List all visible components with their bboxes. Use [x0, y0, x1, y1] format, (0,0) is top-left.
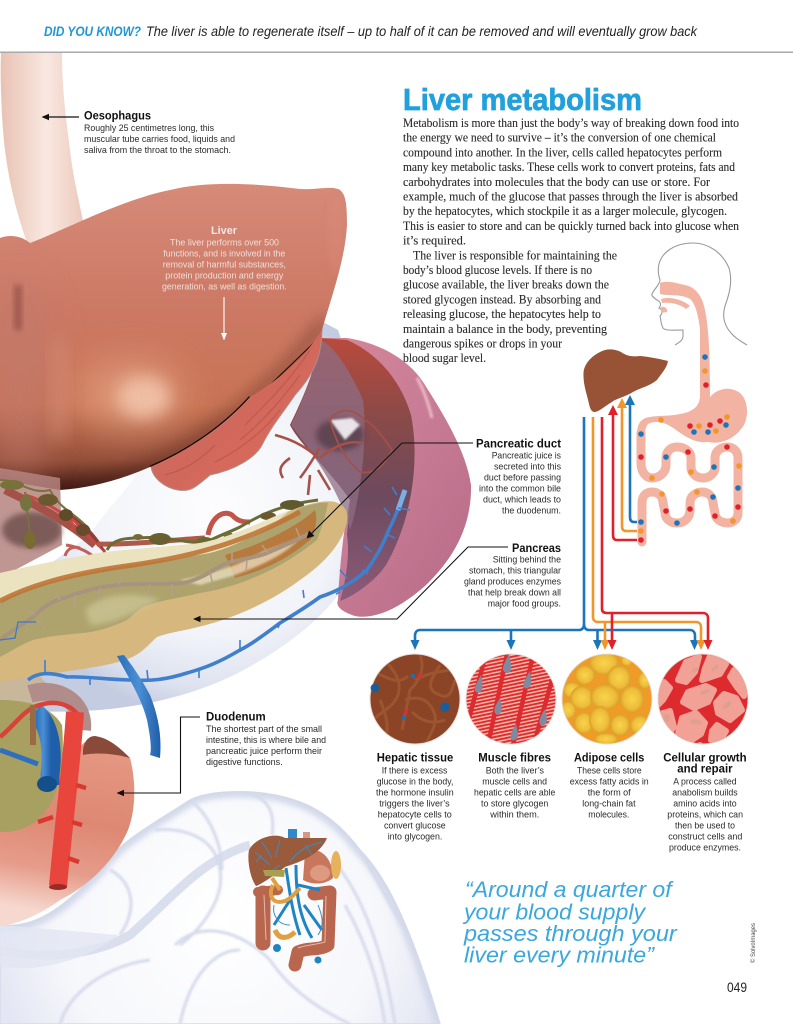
callout: duodenum: digestive functions.: [206, 756, 283, 767]
circle: muscle fibres: [466, 650, 556, 745]
digestive tract: [637, 282, 747, 542]
callout: liver: Liver: [211, 225, 238, 237]
body text: dangerous spikes or drops in your: [403, 336, 563, 350]
callout: pancreatic duct: duct before passing: [484, 472, 561, 482]
callout: pancreatic duct: into the common bile: [479, 482, 561, 494]
column: muscle fibres: hepatic cells are able: [474, 786, 555, 797]
column: cellular growth and repair: Cellular growth: [663, 751, 747, 765]
distribution arrows to cells: [410, 417, 712, 650]
callout: pancreatic duct: the duodenum.: [502, 504, 561, 516]
column: cellular growth and repair: produce enzymes.: [669, 841, 741, 852]
column: adipose cells: long-chain fat: [582, 797, 636, 808]
body text: glucose available, the liver breaks down the: [403, 278, 609, 292]
callout: liver: functions, and is involved in the: [163, 247, 285, 258]
column: cellular growth and repair: amino acids into: [673, 797, 737, 808]
column: adipose cells: excess fatty acids in: [570, 775, 649, 786]
column: hepatic tissue: glucose in the body,: [377, 775, 453, 786]
column: muscle fibres: within them.: [489, 808, 539, 819]
illustration: oesophagus: [1, 52, 84, 245]
callout: oesophagus: [42, 108, 235, 155]
pull quote: [462, 877, 678, 968]
illustration: miniature abdominal organs: [248, 829, 341, 965]
callout: duodenum: The shortest part of the small: [206, 723, 322, 734]
digestive system diagram: [583, 243, 747, 543]
callout: pancreatic duct: Pancreatic juice is: [492, 450, 561, 460]
callout: pancreas: Sitting behind the: [493, 554, 561, 565]
column: muscle fibres: Muscle fibres: [478, 751, 551, 765]
body text: [403, 116, 739, 365]
did you know label: DID YOU KNOW?: [44, 24, 141, 39]
callout: pancreas: Pancreas: [512, 541, 561, 555]
column: cellular growth and repair: A process called: [673, 775, 737, 786]
illustration: transparent large intestine: [0, 792, 440, 1024]
did you know fact: The liver is able to regenerate itself – up to half of it can be removed and will eventually grow back: [146, 23, 698, 39]
column: hepatic tissue: If there is excess: [382, 764, 448, 775]
illustration: feeding vessels above pancreas: [97, 500, 318, 550]
image credit: © SolvoImages: [749, 922, 757, 963]
column: muscle fibres: Both the liver’s: [486, 764, 544, 775]
column: adipose cells: These cells store: [577, 764, 642, 775]
header strip: [0, 23, 793, 53]
column: hepatic tissue: triggers the liver’s: [379, 797, 450, 808]
column: muscle fibres: [474, 751, 555, 819]
body text: carbohydrates into molecules that the body can use or store. For: [403, 175, 711, 189]
column: cellular growth and repair: anabolism builds: [672, 786, 738, 797]
illustration: translucent liver lobe with vessels: [0, 468, 105, 578]
column: hepatic tissue: [376, 751, 454, 841]
callout: pancreas: gland produces enzymes: [464, 576, 561, 587]
callout: liver: removal of harmful substances,: [163, 258, 286, 269]
body text: example, much of the glucose that passes through the liver is absorbed: [403, 190, 739, 204]
illustration: duodenum: [0, 692, 134, 926]
callout: pancreatic duct: Pancreatic duct: [476, 436, 561, 450]
head outline: [652, 243, 747, 345]
callout: liver: protein production and energy: [165, 269, 284, 280]
callout: duodenum: pancreatic juice perform their: [206, 745, 322, 756]
callout: pancreatic duct: secreted into this: [494, 460, 561, 472]
callout: oesophagus: Roughly 25 centimetres long, this: [84, 122, 214, 133]
body text: The liver is responsible for maintaining the: [413, 248, 617, 262]
column: hepatic tissue: Hepatic tissue: [377, 751, 454, 765]
column: adipose cells: molecules.: [588, 808, 629, 819]
body text: maintain a balance in the body, preventing: [403, 322, 607, 336]
body text: compound into another. In the liver, cells called hepatocytes perform: [403, 145, 722, 159]
column: muscle fibres: muscle cells and: [482, 775, 547, 786]
callout: pancreas: stomach, this triangular: [469, 565, 561, 576]
column: muscle fibres: to store glycogen: [481, 797, 548, 808]
callout: oesophagus: Oesophagus: [84, 108, 151, 122]
circle: cellular growth and repair: [657, 654, 748, 753]
column: adipose cells: Adipose cells: [574, 751, 645, 765]
illustration: translucent stomach bubble: [0, 314, 362, 712]
column: cellular growth and repair: then be used to: [675, 819, 735, 830]
pull quote: passes through your: [463, 921, 678, 946]
pull quote: your blood supply: [462, 899, 647, 924]
column: cellular growth and repair: and repair: [677, 762, 733, 776]
pull quote: liver every minute”: [464, 943, 656, 968]
body text: body’s blood glucose levels. If there is no: [403, 263, 592, 277]
absorption arrows to liver: [613, 402, 637, 540]
column: cellular growth and repair: [663, 751, 747, 852]
callout: pancreatic duct: [306, 436, 561, 538]
body text: blood sugar level.: [403, 351, 486, 365]
column: adipose cells: the form of: [588, 786, 631, 797]
body text: stored glycogen instead. By absorbing and: [403, 292, 602, 306]
page number: 049: [727, 980, 747, 995]
column: hepatic tissue: hepatocyte cells to: [378, 808, 452, 819]
title: Liver metabolism: [403, 82, 642, 117]
callout: duodenum: [116, 710, 326, 796]
callout: pancreatic duct: duct, which leads to: [483, 494, 561, 504]
callout: liver: generation, as well as digestion.: [162, 280, 287, 291]
liver silhouette: [583, 349, 668, 412]
callout: oesophagus: saliva from the throat to the stomach.: [84, 144, 231, 155]
column: hepatic tissue: into glycogen.: [388, 830, 442, 841]
body text: This is easier to store and can be quickly turned back into glucose when: [403, 219, 739, 233]
column: hepatic tissue: convert glucose: [384, 819, 446, 830]
callout: pancreas: that help break down all: [468, 587, 561, 598]
callout: duodenum: Duodenum: [206, 710, 266, 724]
circle: adipose cells: [560, 651, 652, 745]
illustration: splenic vein: [28, 487, 410, 758]
column: hepatic tissue: the hormone insulin: [376, 786, 454, 797]
body text: releasing glucose, the hepatocytes help to: [403, 307, 601, 321]
illustration: pancreas: [0, 501, 348, 712]
body text: many key metabolic tasks. These cells work to convert proteins, fats and: [403, 160, 736, 174]
illustration: liver: [0, 184, 347, 490]
column: adipose cells: [570, 751, 649, 819]
column: cellular growth and repair: proteins, which can: [667, 808, 743, 819]
nutrient dots: [638, 354, 742, 543]
callout: pancreas: [193, 541, 561, 622]
body text: it’s required.: [403, 234, 466, 248]
column: cellular growth and repair: construct cells and: [668, 830, 742, 841]
pull quote: “Around a quarter of: [465, 877, 675, 902]
body text: by the hepatocytes, which stockpile it as a larger molecule, glycogen.: [403, 204, 727, 218]
illustration: spleen: [275, 338, 471, 617]
body text: the energy we need to survive – it’s the conversion of one chemical: [403, 131, 717, 145]
body text: Metabolism is more than just the body’s way of breaking down food into: [403, 116, 739, 130]
circle: hepatic tissue: [370, 654, 460, 745]
callout: liver: [162, 225, 287, 340]
callout: liver: The liver performs over 500: [170, 236, 279, 247]
callout: duodenum: intestine, this is where bile and: [206, 734, 326, 745]
callout: pancreas: major food groups.: [488, 598, 561, 609]
callout: oesophagus: muscular tube carries food, liquids and: [84, 133, 235, 144]
